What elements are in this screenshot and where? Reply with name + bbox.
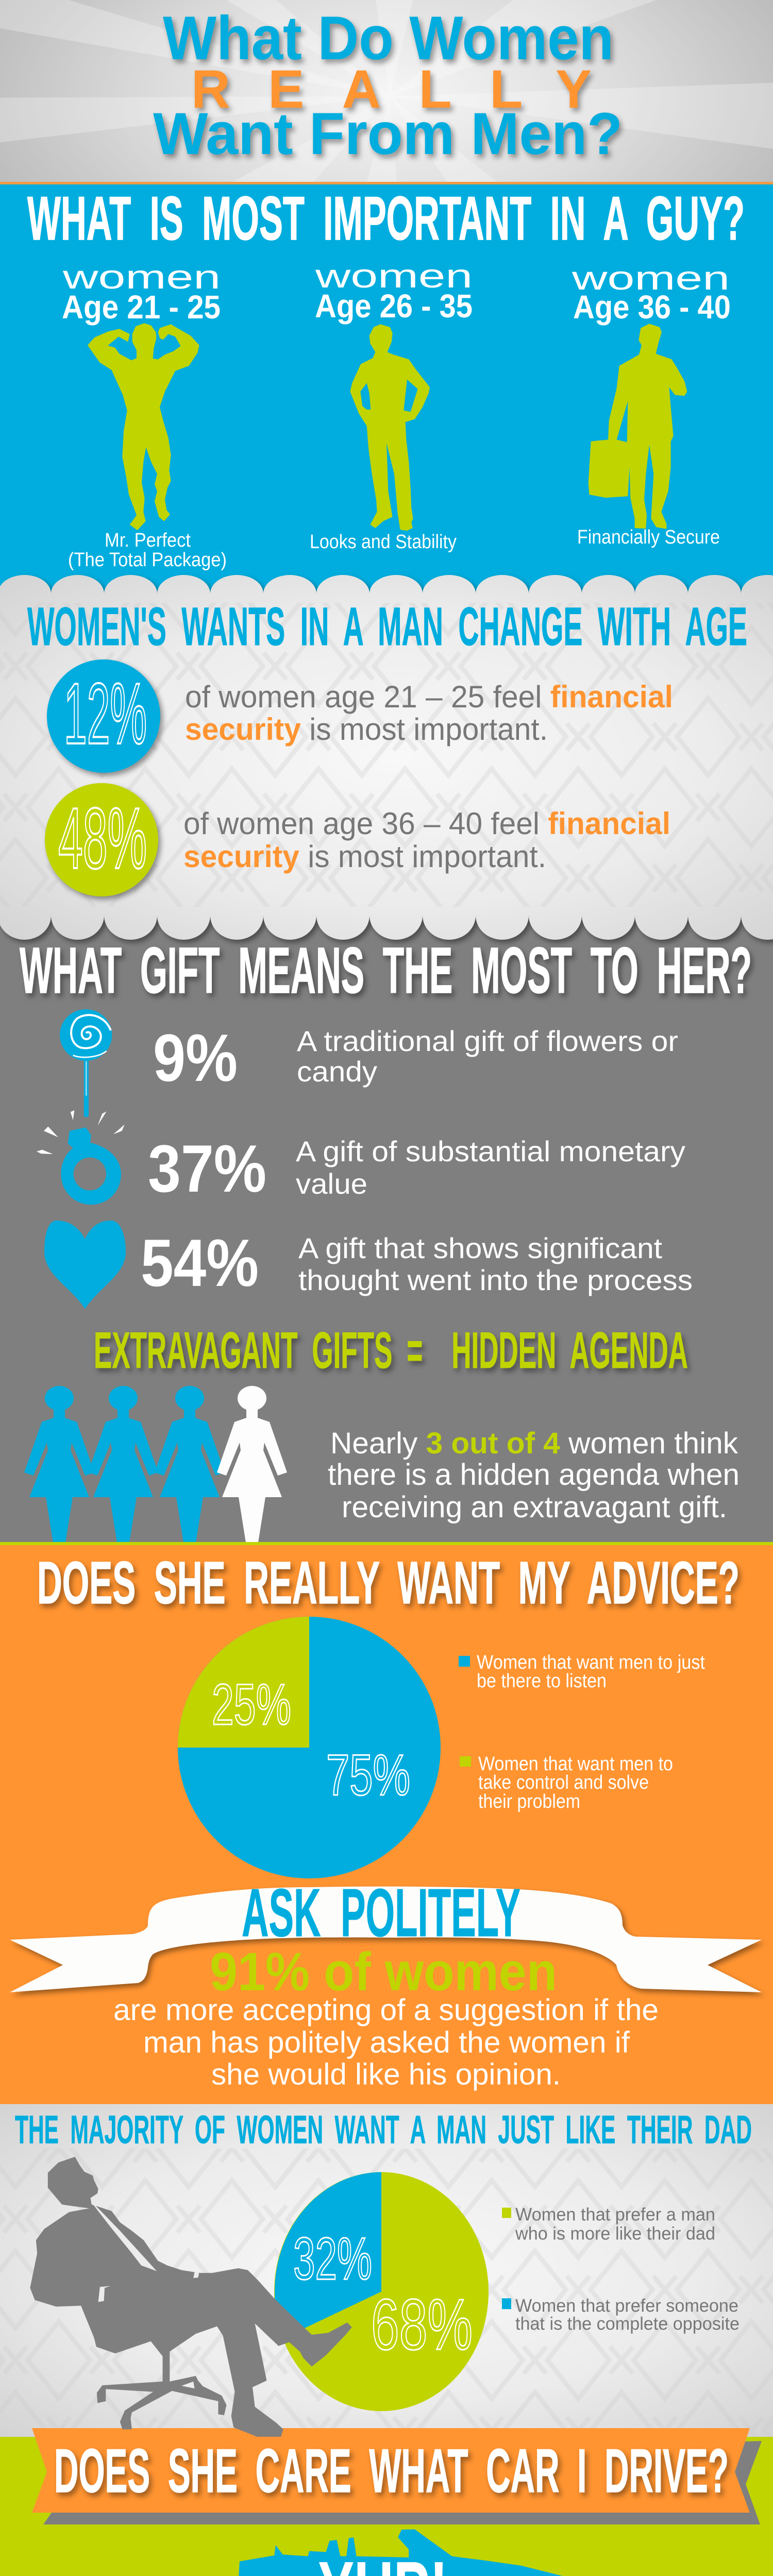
text: 12% statement: security is most important.	[185, 712, 548, 747]
text: polite suggestion: man has politely asked the women if	[143, 2026, 630, 2059]
pie chart: advice: 75%	[326, 1743, 410, 1807]
legend: take control: Women that want men to	[478, 1753, 673, 1775]
column: women age 36-40: Age 36 - 40	[573, 289, 731, 326]
text: thoughtful gift: A gift that shows significant	[298, 1232, 662, 1264]
panel: does she want my advice	[0, 1542, 773, 2104]
icon: man reclining in office chair	[30, 2157, 352, 2437]
icon: diamond ring	[37, 1110, 125, 1205]
text: polite suggestion: are more accepting of a suggestion if the	[113, 1993, 659, 2027]
icon: four women, three highlighted	[24, 1386, 287, 1543]
text: thoughtful gift	[298, 1232, 693, 1296]
pie chart: advice: 25%	[212, 1672, 291, 1737]
panel: what gift means the most	[20, 934, 752, 1543]
icon: standing man silhouette	[350, 324, 430, 531]
text: polite suggestion: she would like his opinion.	[211, 2058, 561, 2091]
legend: take control	[460, 1753, 673, 1812]
label: financially secure: Financially Secure	[577, 527, 720, 548]
legend: listen: be there to listen	[477, 1670, 607, 1692]
text: monetary gift	[296, 1135, 685, 1200]
stat: 91% of women: 91% of women	[210, 1942, 557, 2002]
column: women age 36-40	[572, 259, 731, 326]
title: REALLY	[191, 59, 592, 120]
text: 48% statement	[183, 806, 670, 874]
text: thoughtful gift: thought went into the process	[298, 1264, 693, 1296]
text: hidden agenda statement: receiving an extravagant gift.	[342, 1490, 727, 1524]
icon: man with briefcase silhouette	[589, 324, 687, 529]
text: hidden agenda statement: Nearly 3 out of 4 women think	[330, 1427, 738, 1460]
stat: 54%: 54%	[141, 1225, 259, 1300]
pie chart: dad: 32%	[293, 2225, 372, 2292]
legend: opposite: Women that prefer someone	[515, 2296, 738, 2316]
panel: does she care what car	[0, 2428, 773, 2576]
label: mr perfect: Mr. Perfect	[105, 530, 191, 551]
legend: like dad: who is more like their dad	[515, 2224, 715, 2244]
stat circle: 48%: 48%	[58, 790, 147, 887]
text: 12% statement: of women age 21 – 25 feel financial	[185, 680, 673, 714]
pie chart: dad	[274, 2172, 489, 2411]
ribbon: ask politely	[10, 1875, 762, 1992]
text: polite suggestion	[113, 1993, 659, 2091]
title	[153, 4, 623, 167]
panel: dark gray gift section background	[0, 912, 773, 1543]
column: women age 36-40: women	[572, 259, 730, 297]
ribbon: ask politely: ASK POLITELY	[242, 1875, 520, 1951]
legend: listen	[459, 1652, 705, 1692]
legend: take control: take control and solve	[478, 1772, 649, 1793]
pie chart: dad: 68%	[371, 2284, 473, 2365]
column: women age 21-25: Age 21 - 25	[62, 289, 221, 326]
text: 12% statement	[185, 680, 673, 747]
legend: like dad	[502, 2205, 715, 2244]
panel: dad comparison	[15, 2108, 752, 2437]
column: women age 26-35	[315, 257, 473, 325]
stat circle: 12%	[47, 659, 160, 773]
column: women age 26-35: Age 26 - 35	[315, 287, 473, 325]
text: 48% statement: security is most important.	[183, 839, 546, 874]
legend: take control: their problem	[478, 1791, 580, 1812]
panel: header background with rays	[0, 0, 773, 182]
text: monetary gift: value	[296, 1167, 367, 1200]
title: Want From Men?	[153, 101, 623, 167]
column: women age 26-35: women	[315, 257, 473, 295]
icon: muscular man silhouette	[88, 323, 199, 530]
legend: opposite: that is the complete opposite	[515, 2314, 740, 2334]
legend: opposite	[502, 2296, 740, 2334]
label: mr perfect: (The Total Package)	[68, 549, 227, 571]
label: looks and stability: Looks and Stability	[310, 531, 457, 553]
legend: like dad: Women that prefer a man	[515, 2205, 715, 2225]
label: mr perfect	[68, 530, 227, 571]
text: hidden agenda statement: there is a hidden agenda when	[328, 1458, 740, 1492]
stat circle: 48%	[45, 783, 158, 896]
text: traditional gift: A traditional gift of flowers or	[297, 1025, 678, 1057]
text: traditional gift: candy	[297, 1055, 377, 1088]
panel: what is most important	[0, 182, 773, 599]
stat: 37%: 37%	[148, 1131, 266, 1206]
icon: lollipop	[60, 1009, 112, 1117]
title: What Do Women	[163, 4, 614, 73]
panel: wants change with age	[0, 575, 773, 940]
stat circle: 12%: 12%	[64, 665, 147, 762]
text: 48% statement: of women age 36 – 40 feel financial	[183, 806, 670, 841]
text: traditional gift	[297, 1025, 678, 1088]
column: women age 21-25	[62, 258, 221, 326]
column: women age 21-25: women	[62, 258, 221, 296]
text: hidden agenda statement	[328, 1427, 740, 1524]
text: monetary gift: A gift of substantial monetary	[296, 1135, 685, 1167]
icon: convertible car	[231, 2529, 587, 2576]
pie chart: advice	[178, 1617, 441, 1878]
stat: 9%: 9%	[153, 1020, 238, 1095]
panel: dad section background	[0, 2104, 773, 2437]
banner: car question	[32, 2428, 762, 2524]
icon: heart	[44, 1221, 126, 1309]
legend: listen: Women that want men to just	[477, 1652, 705, 1673]
